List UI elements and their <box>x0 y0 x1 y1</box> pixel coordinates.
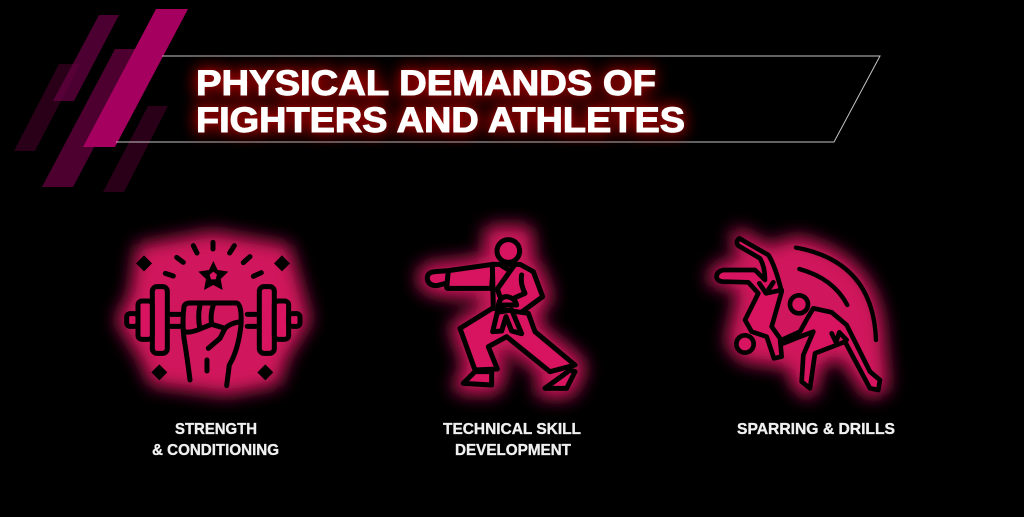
decorative slanted stripes <box>14 9 188 192</box>
label: strength and conditioning <box>152 421 279 459</box>
label: strength and conditioning: & CONDITIONING <box>152 442 279 459</box>
title: PHYSICAL DEMANDS OF <box>196 64 656 103</box>
title: FIGHTERS AND ATHLETES <box>196 101 685 140</box>
label: strength and conditioning: STRENGTH <box>175 421 257 438</box>
label: technical skill development: DEVELOPMENT <box>455 442 571 459</box>
title frame <box>116 56 880 142</box>
title <box>196 64 685 140</box>
icon: martial artist punching <box>427 235 575 388</box>
label: technical skill development <box>443 421 581 459</box>
icon: judo throw <box>717 238 880 390</box>
label: technical skill development: TECHNICAL SKILL <box>443 421 581 438</box>
icon: dumbbell and fist <box>120 235 307 392</box>
label: sparring and drills: SPARRING & DRILLS <box>737 421 895 438</box>
